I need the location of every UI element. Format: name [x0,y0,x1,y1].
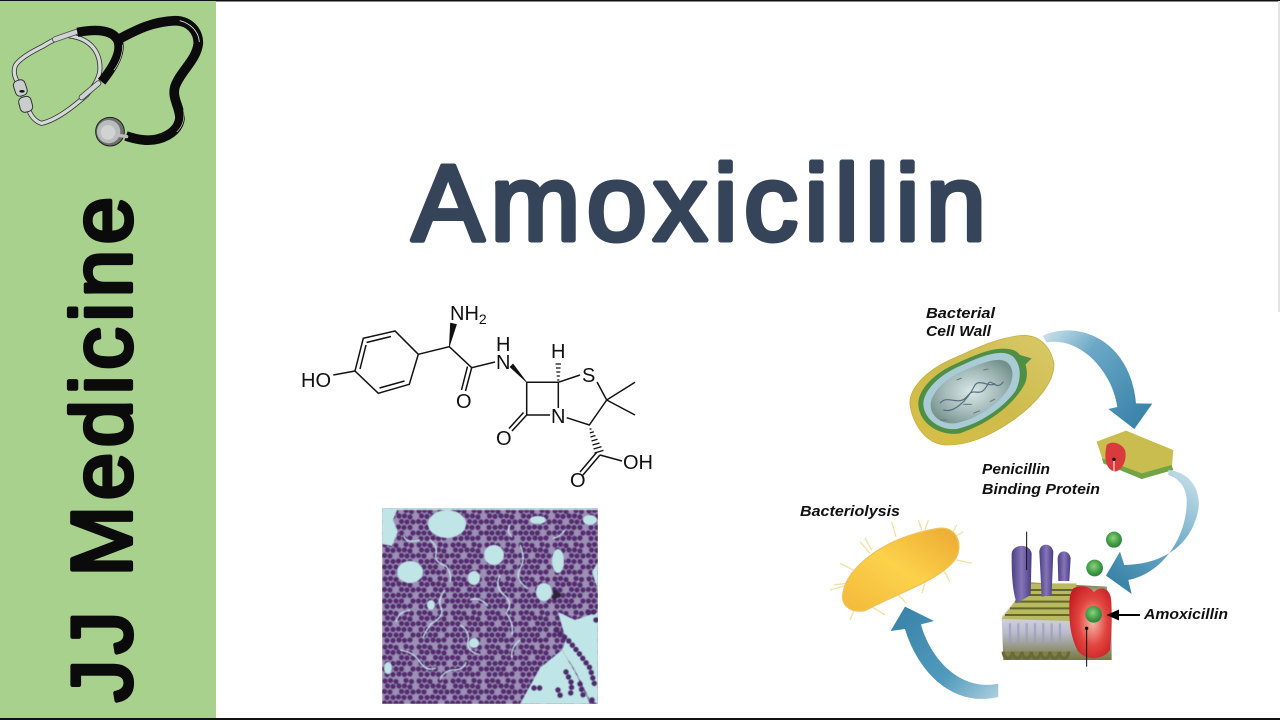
black tubing [77,21,199,140]
red binding protein [1069,586,1112,658]
benzene ring [355,331,418,393]
arrow pointer to amoxicillin [1109,611,1140,619]
chest piece [96,117,127,146]
label: bacteriolysis: Bacteriolysis [800,503,900,520]
atom labels: 2 [479,311,487,327]
sidebar title: JJ Medicine [55,197,150,702]
label: amoxicillin: Amoxicillin [1143,606,1228,623]
atom labels: N [496,352,510,374]
diagram: mechanism of action [800,305,1228,699]
icon: stethoscope [12,21,199,146]
purple surface proteins [1012,546,1032,603]
atom labels: O [496,428,512,450]
free amoxicillin spheres [1106,532,1122,548]
atom labels: O [456,391,472,413]
label: bacterial cell wall: Bacterial [926,305,996,322]
bacterium with cell wall [910,335,1054,445]
pale background gaps [382,508,598,704]
panel: green sidebar [0,1,216,718]
grey binaural tubes [14,32,100,123]
wedge bonds [449,323,527,382]
protein pointer line [1085,628,1088,667]
atom labels: S [582,365,595,387]
membrane with protein and amoxicillin [1002,532,1122,667]
bacteriolysis bacterium [830,520,972,620]
bonds [333,347,635,475]
atom labels: N [551,406,565,428]
scrollbar sliver [1278,1,1280,312]
atom labels: NH [450,303,479,325]
atom labels [301,303,653,492]
label: bacterial cell wall: Cell Wall [926,323,992,340]
label: penicillin binding protein: Binding Protein [982,481,1100,498]
label: penicillin binding protein [982,461,1100,498]
atom labels: H [496,334,510,356]
label: bacterial cell wall [926,305,996,340]
cell wall fragment with binding protein [1097,431,1173,479]
arrow: binding protein to amoxicillin [1106,470,1199,594]
scattered dark cells [534,592,598,700]
arrow: amoxicillin to bacteriolysis [891,607,998,699]
label pointer line [1025,532,1028,570]
arrow: cell wall to binding protein [1043,330,1152,429]
bound amoxicillin sphere [1085,606,1102,623]
title: Amoxicillin [412,142,986,263]
chemical structure of amoxicillin [301,303,653,492]
top edge line [0,0,1280,2]
micrograph of cocci bacteria [382,508,598,704]
label: penicillin binding protein: Penicillin [982,461,1050,478]
atom labels: O [570,470,586,492]
ear pieces [12,79,34,113]
bottom edge line [0,718,1280,720]
atom labels: HO [301,370,331,392]
hashed bonds [556,364,604,453]
membrane lipid bilayer [1002,582,1112,660]
atom labels: H [551,341,565,363]
atom labels: OH [623,452,653,474]
